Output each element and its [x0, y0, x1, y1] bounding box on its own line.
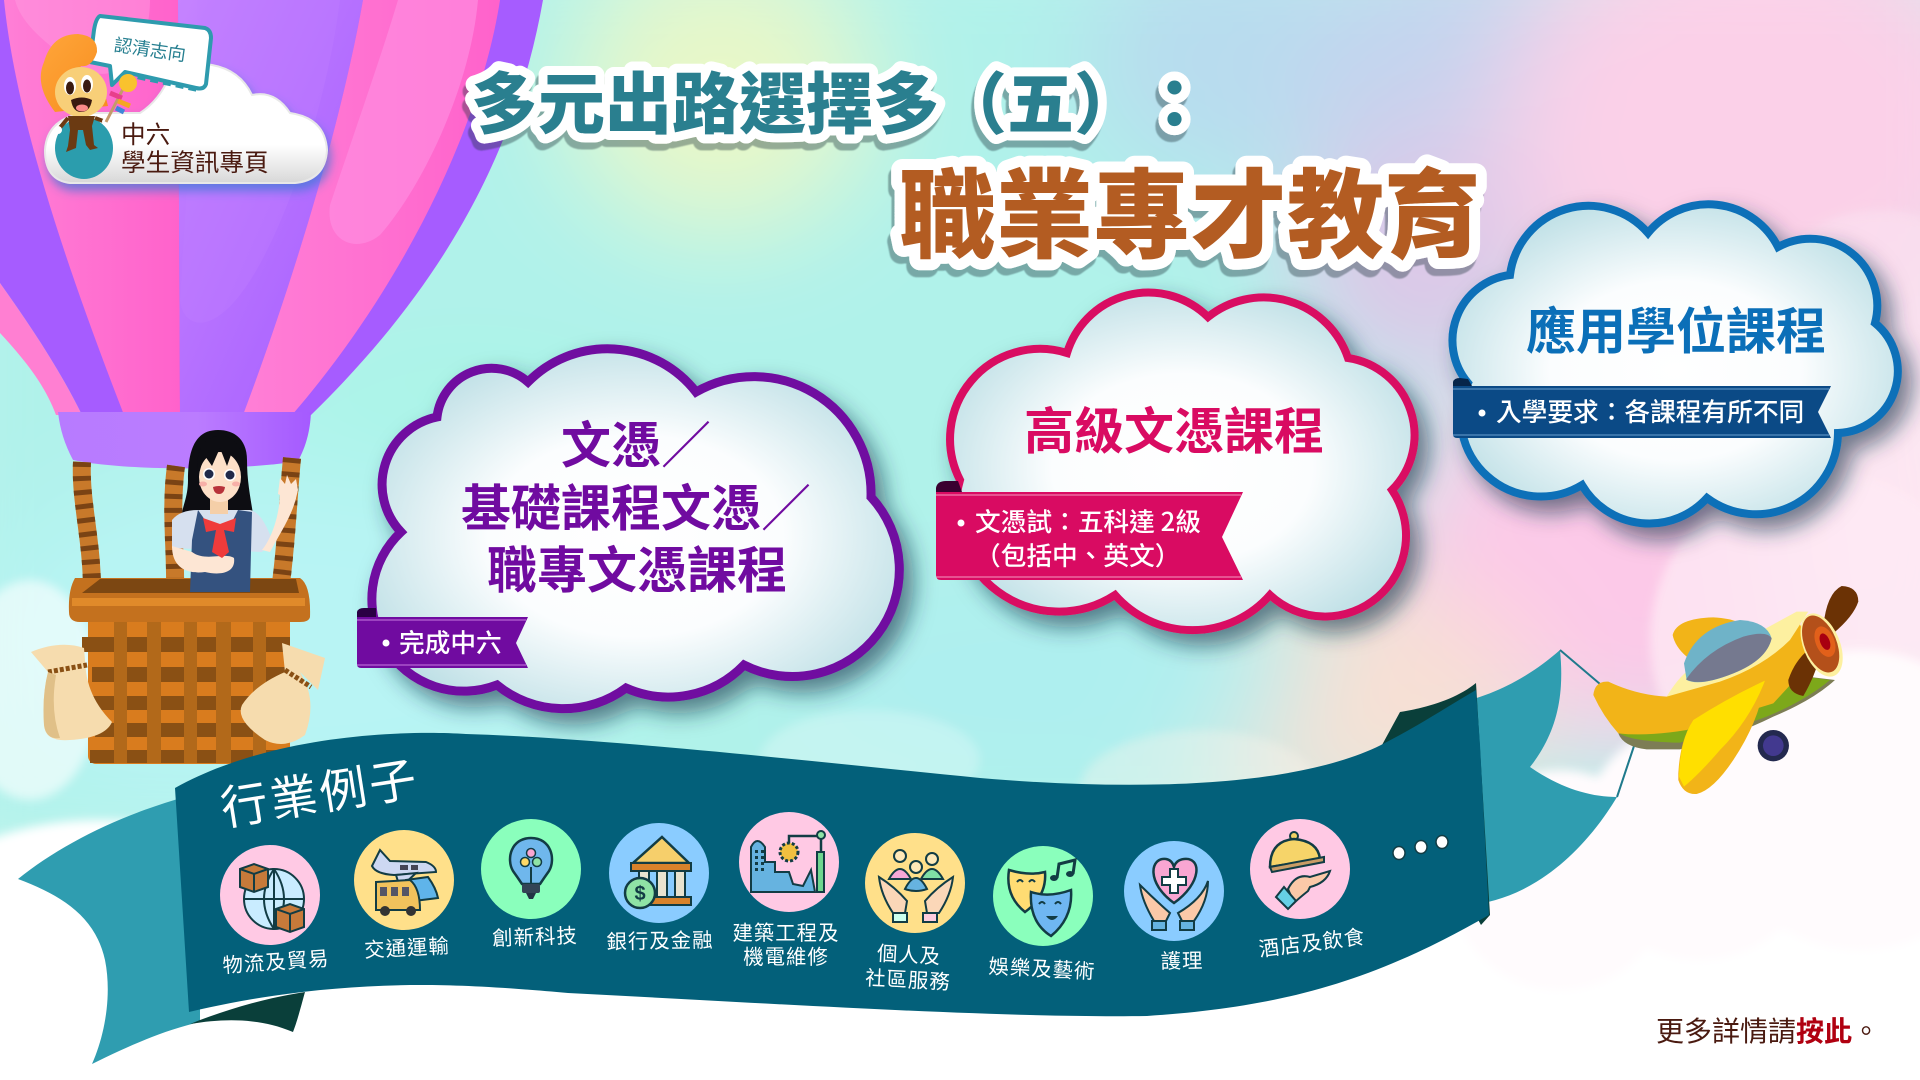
industry labels: 個人及 [876, 942, 942, 969]
panel: higher diploma cloud [936, 293, 1415, 630]
basket [69, 578, 310, 764]
banner: industry examples [18, 650, 1617, 1064]
purple cloud [372, 349, 899, 709]
mascot [41, 34, 137, 152]
blue ribbon: 入學要求：各課程有所不同 [1496, 398, 1804, 427]
hot air balloon [0, 0, 543, 764]
industry labels: 社區服務 [865, 967, 951, 994]
purple cloud heading [461, 418, 811, 599]
pink ribbon: （包括中、英文） [975, 542, 1180, 571]
icon: hotel and catering [1250, 819, 1350, 919]
badge text [121, 121, 269, 177]
banner right tail [1470, 650, 1617, 902]
industry labels: 建築工程及 [733, 922, 839, 945]
basket ropes [82, 458, 292, 590]
panel: applied degree cloud [1452, 204, 1898, 524]
banner fold left [190, 992, 305, 1032]
balloon envelope [0, 0, 543, 415]
speech bubble [90, 16, 211, 90]
banner fold right [1382, 683, 1490, 925]
badge text: 中六 [121, 121, 170, 149]
belly [1618, 673, 1835, 749]
propeller [1823, 586, 1858, 633]
title [471, 68, 1481, 271]
icon: logistics [220, 845, 320, 945]
footer link text: 更多詳情請按此。 [1656, 1016, 1880, 1047]
industry labels: 酒店及飲食 [1258, 926, 1367, 961]
sandbag right [241, 643, 325, 744]
icon: construction [739, 812, 839, 912]
industry labels: 機電維修 [743, 946, 829, 969]
industry labels: 創新科技 [492, 925, 578, 950]
banner left tail [18, 797, 200, 1064]
fuselage [1593, 615, 1813, 734]
badge cloud [45, 64, 327, 183]
industry labels: 銀行及金融 [606, 929, 714, 954]
purple ribbon [357, 608, 528, 668]
pink ribbon: 文憑試：五科達 2級 [975, 502, 1201, 539]
blue cloud heading: 應用學位課程 [1526, 304, 1826, 360]
badge text: 學生資訊專頁 [121, 149, 269, 177]
bubble text: 認清志向 [113, 35, 187, 65]
industry labels: 護理 [1160, 950, 1204, 973]
icon: community service [865, 833, 965, 933]
info badge [41, 16, 327, 183]
wing [1678, 681, 1765, 794]
icon: banking: $ [634, 883, 646, 905]
title line 2: 職業專才教育 [899, 162, 1481, 271]
icon: entertainment [993, 846, 1093, 946]
purple cloud heading: 職專文憑課程 [487, 543, 787, 599]
banner heading: 行業例子 [215, 740, 423, 839]
blue cloud [1452, 204, 1898, 524]
banner tow lines [1560, 650, 1634, 797]
pink cloud heading: 高級文憑課程 [1024, 404, 1324, 460]
pink cloud [950, 293, 1415, 630]
balloon collar [58, 412, 311, 468]
icon: nursing [1124, 841, 1224, 941]
canopy [1684, 620, 1772, 682]
tail fin [1673, 617, 1737, 657]
purple ribbon: 完成中六 [399, 629, 502, 658]
icon: innovation [481, 819, 581, 919]
industry labels: 娛樂及藝術 [988, 955, 1096, 984]
industry labels: 物流及貿易 [222, 947, 330, 978]
icon: transport [354, 830, 454, 930]
pink ribbon [936, 481, 1243, 580]
purple cloud heading: 文憑／ [561, 418, 711, 474]
panel: diploma cloud [357, 349, 899, 709]
sandbag left [31, 645, 112, 740]
student figure [172, 430, 298, 592]
title line 1: 多元出路選擇多（五）： [471, 68, 1208, 143]
icon: banking [609, 823, 709, 923]
banner ribbon [175, 690, 1489, 1016]
airplane [1593, 586, 1858, 794]
wheel [1758, 730, 1789, 761]
continuation dots [1393, 836, 1448, 860]
industry labels: 交通運輸 [364, 935, 450, 962]
blue ribbon [1453, 378, 1831, 438]
teal circle [55, 117, 113, 179]
purple cloud heading: 基礎課程文憑／ [461, 481, 811, 537]
industry labels [222, 922, 1367, 994]
